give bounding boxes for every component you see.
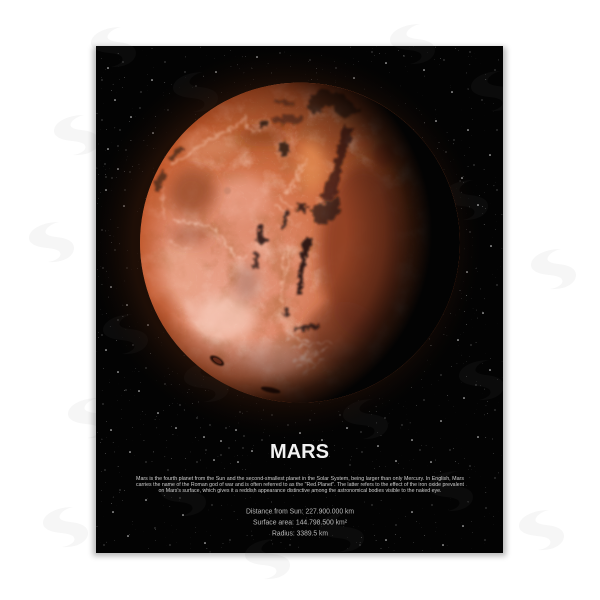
description: on Mars's surface, which gives it a reddish appearance distinctive among the astronomical bodies visible to the naked eye.	[158, 488, 442, 494]
light canyon veins	[163, 117, 262, 259]
star field	[102, 52, 497, 545]
mottled light terrain	[140, 83, 458, 382]
Valles Marineris central chasm	[253, 197, 340, 331]
northern dark patches	[155, 89, 360, 195]
saturated upper terrain	[176, 82, 418, 160]
terminator shadow	[139, 81, 461, 404]
poster panel	[96, 46, 503, 553]
planet glow	[90, 48, 480, 438]
light plateau at canyon	[277, 158, 307, 302]
planet: Mars	[130, 72, 463, 408]
ridge texture	[163, 106, 364, 364]
planet statistics	[246, 506, 354, 538]
planet statistics: Distance from Sun: 227.900.000 km	[246, 506, 354, 516]
volcano spots	[182, 187, 281, 395]
poster shadow	[93, 47, 506, 556]
fine star noise	[96, 46, 503, 553]
planet statistics: Radius: 3389.5 km	[272, 528, 328, 538]
title: MARS	[270, 441, 329, 463]
description: carries the name of the Roman god of war and is often referred to as the "Red Planet". The latter refers to the effect of the iron oxide prevalent	[136, 482, 465, 488]
limb colouring	[139, 82, 461, 403]
bright highlands	[157, 136, 325, 375]
eastern rust clouds	[356, 140, 386, 164]
Valles Marineris upper trench	[321, 125, 354, 201]
planet surface	[140, 83, 460, 403]
description	[136, 476, 465, 494]
watermarks on poster	[108, 72, 478, 424]
mottled dark terrain	[140, 150, 454, 402]
dark plains	[148, 128, 407, 368]
description: Mars is the fourth planet from the Sun and the second-smallest planet in the Solar System, being larger than only Mercury. In English, Mars	[136, 476, 464, 482]
southern bright terrain	[287, 332, 330, 375]
planet statistics: Surface area: 144.798.500 km²	[253, 518, 347, 526]
